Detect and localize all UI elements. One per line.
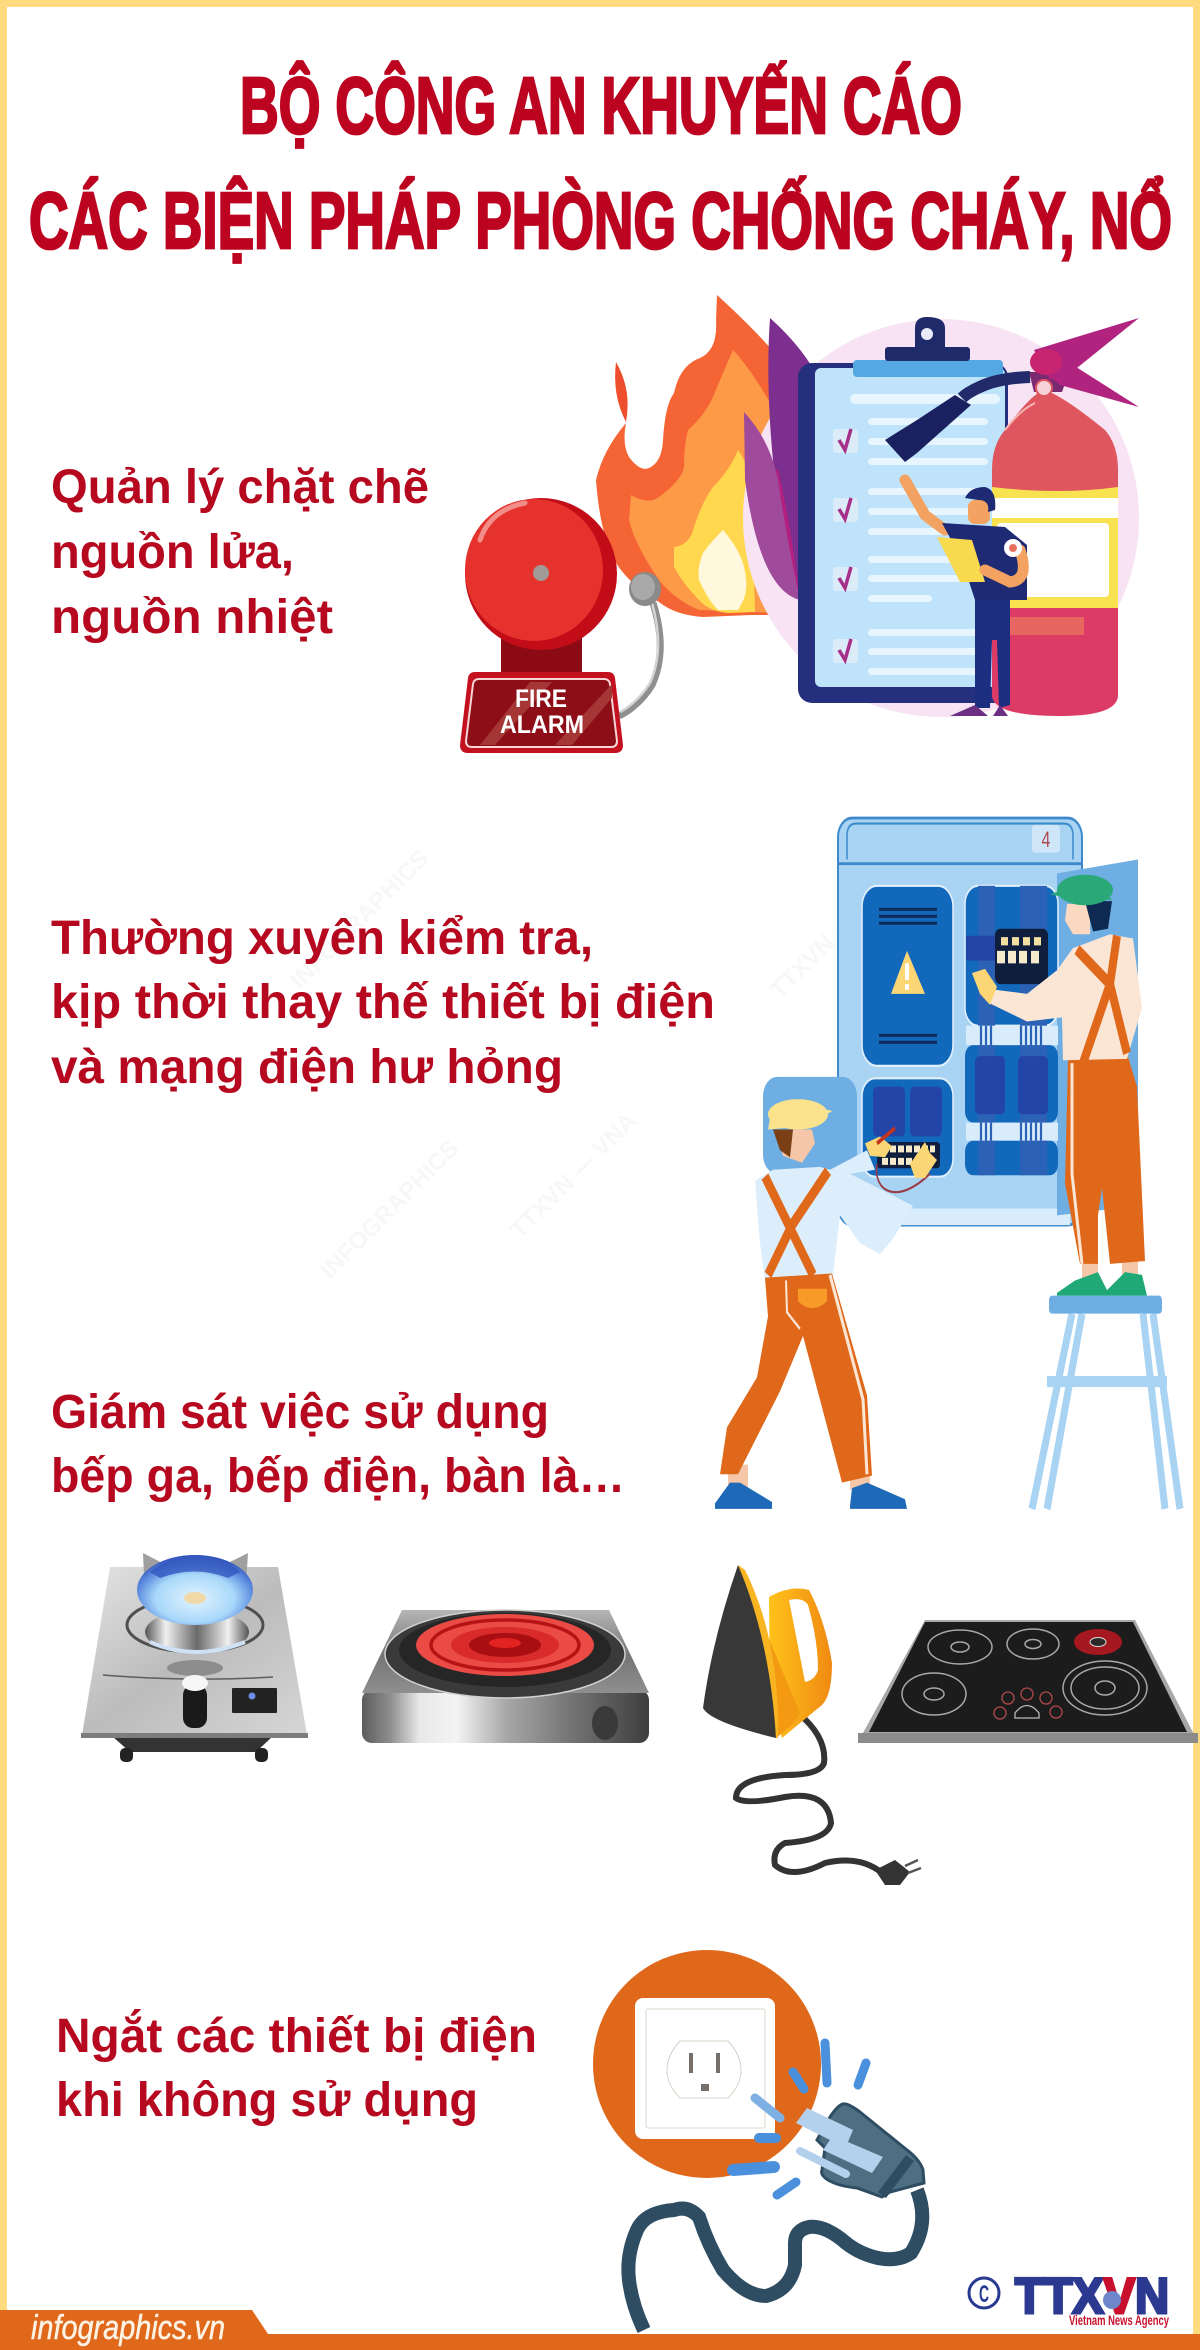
purple leaves (744, 318, 815, 600)
logo: TTXVN: C (979, 2281, 989, 2308)
icon: induction cooktop (858, 1620, 1198, 1743)
text block: unplug when not in use (56, 2008, 537, 2127)
watermarks: INFOGRAPHICS (285, 845, 434, 994)
bell striker (619, 572, 661, 716)
alarm plate: FIRE (515, 685, 567, 713)
panel: fire source management (51, 295, 1139, 753)
watermarks (285, 845, 902, 1284)
illustration: checklist and extinguisher (743, 317, 1139, 717)
illustration: electrical cabinet (838, 818, 1138, 1225)
text block: monitor appliance use: Giám sát việc sử dụng (51, 1386, 549, 1439)
text block: manage fire sources: nguồn nhiệt (51, 591, 333, 644)
text block: manage fire sources: Quản lý chặt chẽ (51, 461, 429, 514)
icon: clothes iron (703, 1565, 921, 1885)
worker on stool (972, 875, 1180, 1509)
icon: electric hot plate (362, 1610, 649, 1743)
icon: sparks (733, 2043, 866, 2195)
icon: plug and cable (628, 2104, 924, 2330)
panel: unplug devices (56, 1950, 924, 2330)
lower left breaker panel (862, 1078, 953, 1177)
text block: manage fire sources: nguồn lửa, (51, 526, 294, 579)
alarm plate: ALARM (500, 711, 584, 739)
text block: check electrical equipment (51, 912, 715, 1094)
panel: electrical equipment inspection (51, 818, 1180, 1509)
text block: unplug when not in use: Ngắt các thiết bị điện (56, 2008, 537, 2063)
extinguisher head (1029, 318, 1139, 407)
watermarks: TTXVN — VNA (505, 1107, 642, 1244)
iron cord and plug (736, 1713, 921, 1885)
checklist lines (850, 394, 1000, 675)
footer bar: infographics.vn (31, 2309, 225, 2347)
alarm plate (460, 672, 623, 753)
warning panel (862, 886, 953, 1066)
illustration: electrical cabinet: 4 (1042, 829, 1051, 853)
footer bar (0, 2309, 1200, 2350)
icon: gas stove (81, 1553, 308, 1762)
icon: flame (596, 295, 790, 617)
text block: monitor appliance use (51, 1386, 625, 1503)
watermarks: INFOGRAPHICS (315, 1135, 464, 1284)
text block: check electrical equipment: và mạng điện hư hỏng (51, 1041, 563, 1094)
watermarks: TTXVN — VNA (765, 867, 902, 1004)
clipboard (798, 317, 1008, 703)
icon: wall socket (593, 1950, 821, 2178)
text block: check electrical equipment: Thường xuyên kiểm tra, (51, 912, 593, 965)
cabinet door (1057, 860, 1138, 1215)
title (29, 61, 1172, 265)
hose and nozzle (885, 377, 1030, 462)
fire extinguisher (885, 318, 1139, 716)
right panels (965, 886, 1058, 1175)
text block: manage fire sources (51, 461, 429, 644)
text block: unplug when not in use: khi không sử dụng (56, 2074, 478, 2127)
text block: check electrical equipment: kịp thời thay thế thiết bị điện (51, 976, 715, 1029)
panel: monitor appliances (51, 1386, 1198, 1885)
icon: fire alarm bell (460, 498, 661, 753)
stool (1032, 1296, 1180, 1509)
text block: monitor appliance use: bếp ga, bếp điện, bàn là… (51, 1450, 625, 1503)
worker with tester (715, 1077, 937, 1509)
inspector figure (905, 480, 1027, 716)
logo: TTXVN: TTXVN (1015, 2268, 1169, 2324)
check marks (833, 429, 858, 663)
